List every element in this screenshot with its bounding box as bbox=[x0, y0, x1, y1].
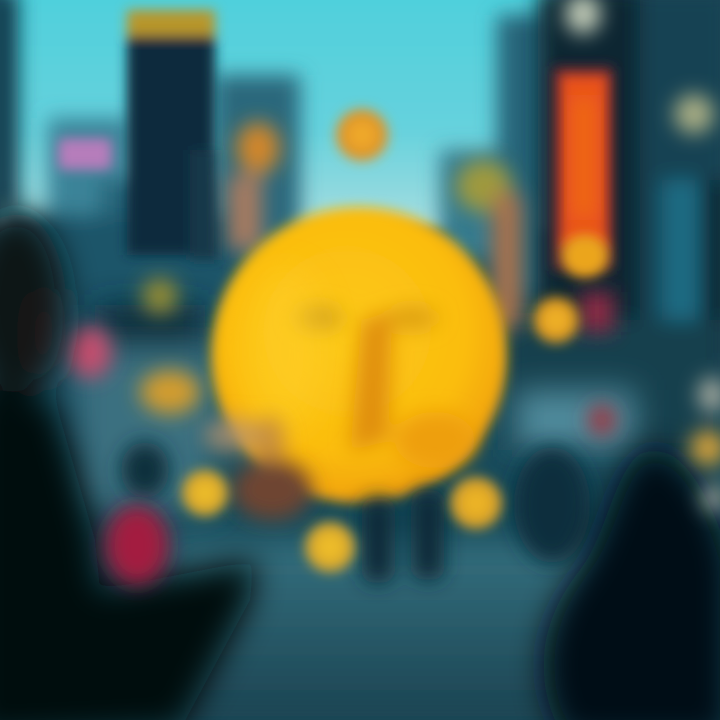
hand: holding coin bbox=[204, 416, 312, 520]
silhouette: left foreground person bbox=[0, 213, 255, 720]
red figure bbox=[105, 505, 169, 585]
street bbox=[170, 540, 590, 720]
sign: pink neon left bbox=[58, 138, 112, 170]
building: dark tower with yellow band bbox=[127, 10, 218, 260]
hand raised behind coin bbox=[456, 160, 522, 330]
sky glow bbox=[0, 0, 560, 230]
building: right dark tower bbox=[505, 0, 720, 450]
coin: right orbit bbox=[533, 297, 579, 343]
coins: lower scattered bbox=[182, 470, 502, 572]
figure: small pedestrians bbox=[121, 442, 590, 583]
coin: small yellow top bbox=[336, 109, 388, 161]
lights: upper right bbox=[565, 0, 714, 134]
lights: far right edge bbox=[588, 377, 720, 512]
coin face marks bbox=[294, 306, 475, 468]
coin: small left glow bbox=[140, 370, 200, 414]
buildings: distant bbox=[0, 0, 552, 445]
silhouette: right foreground person bbox=[544, 448, 720, 720]
mid crowd area bbox=[75, 305, 635, 510]
orange lantern on mid building bbox=[228, 122, 280, 250]
sign: vertical orange neon bbox=[552, 66, 614, 332]
coin: large golden bbox=[211, 207, 507, 503]
pink and yellow street lights bbox=[68, 278, 178, 378]
